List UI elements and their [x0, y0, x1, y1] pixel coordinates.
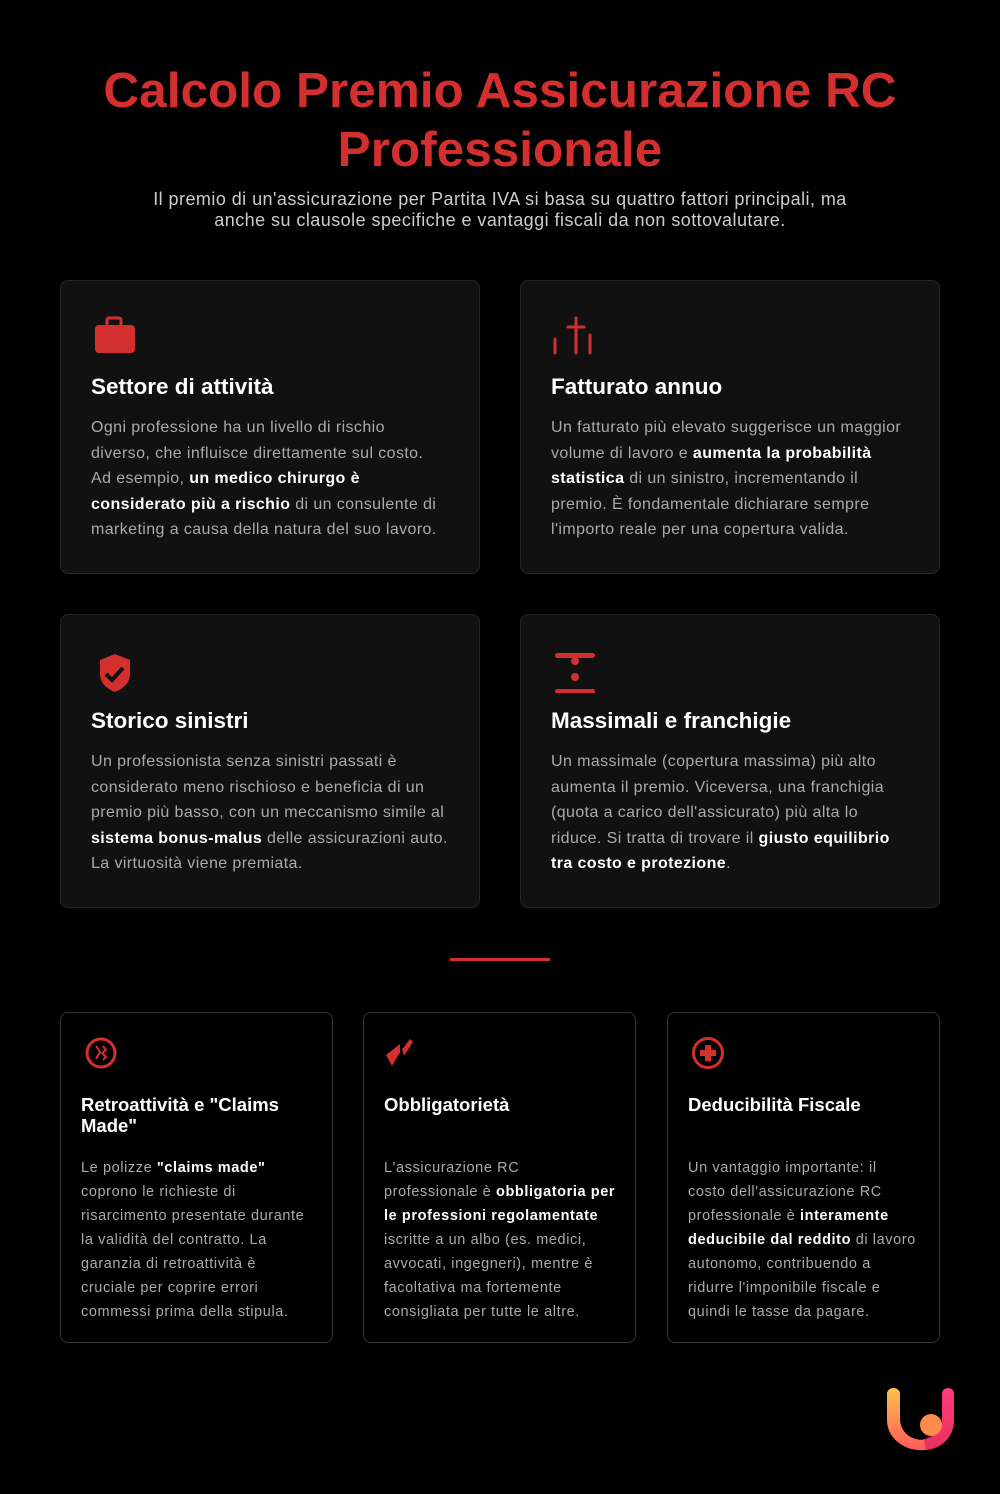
- text: l'importo reale per una copertura valida.: [551, 521, 849, 538]
- text: iscritte a un albo (es. medici,: [384, 1232, 586, 1248]
- text: Le polizze "claims made": [81, 1160, 266, 1176]
- heading: Made": [81, 1115, 137, 1136]
- text: risarcimento presentate durante: [81, 1208, 304, 1224]
- panel: fatturato: [520, 280, 940, 574]
- heading: Massimali e franchigie: [551, 708, 791, 733]
- text: commessi prima della stipula.: [81, 1304, 289, 1320]
- text: [688, 1160, 916, 1320]
- text: riduce. Si tratta di trovare il giusto equilibrio: [551, 830, 890, 846]
- subtitle: Il premio di un'assicurazione per Partita IVA si basa su quattro fattori principali, ma: [153, 189, 847, 209]
- text: costo dell'assicurazione RC: [688, 1184, 882, 1200]
- heading: [81, 1094, 279, 1136]
- heading: Storico sinistri: [91, 708, 249, 733]
- panel: storico: [60, 614, 480, 908]
- icon: briefcase: [95, 316, 135, 353]
- text: professionale è interamente: [688, 1208, 889, 1224]
- text: La virtuosità viene premiata.: [91, 855, 303, 872]
- icon: logo: [887, 1388, 954, 1450]
- panel: massimali: [520, 614, 940, 908]
- icon: bars: [554, 316, 592, 354]
- text: [91, 753, 448, 872]
- icon: circle: [86, 1038, 116, 1068]
- title: [103, 63, 897, 177]
- text: [551, 419, 901, 538]
- text: la validità del contratto. La: [81, 1232, 267, 1248]
- panel: retroattività: [60, 1012, 333, 1343]
- text: volume di lavoro e aumenta la probabilità: [551, 444, 872, 462]
- text: coprono le richieste di: [81, 1184, 236, 1200]
- heading: Retroattività e "Claims: [81, 1094, 279, 1115]
- text: tra costo e protezione.: [551, 855, 731, 872]
- text: Un vantaggio importante: il: [688, 1160, 877, 1176]
- text: aumenta il premio. Viceversa, una franchigia: [551, 778, 884, 796]
- text: Un professionista senza sinistri passati è: [91, 753, 397, 770]
- title: Professionale: [338, 122, 662, 177]
- heading: Settore di attività: [91, 374, 274, 399]
- text: avvocati, ingegneri), mentre è: [384, 1256, 593, 1272]
- icon: bolt: [386, 1039, 413, 1066]
- subtitle: anche su clausole specifiche e vantaggi fiscali da non sottovalutare.: [214, 210, 786, 230]
- panel: settore: [60, 280, 480, 574]
- text: marketing a causa della natura del suo lavoro.: [91, 521, 437, 538]
- text: [384, 1160, 615, 1320]
- text: considerato più a rischio di un consulente di: [91, 496, 436, 512]
- text: Un fatturato più elevato suggerisce un maggior: [551, 419, 901, 436]
- text: le professioni regolamentate: [384, 1208, 598, 1224]
- heading: Deducibilità Fiscale: [688, 1094, 861, 1115]
- text: premio. È fondamentale dichiarare sempre: [551, 496, 869, 512]
- text: statistica di un sinistro, incrementando il: [551, 470, 858, 487]
- text: cruciale per coprire errori: [81, 1280, 258, 1296]
- text: (quota a carico dell'assicurato) più alta lo: [551, 804, 858, 821]
- text: sistema bonus-malus delle assicurazioni auto.: [91, 830, 448, 846]
- text: consigliata per tutte le altre.: [384, 1304, 580, 1320]
- text: [551, 753, 890, 872]
- text: quindi le tasse da pagare.: [688, 1304, 870, 1320]
- text: garanzia di retroattività è: [81, 1256, 256, 1272]
- text: L'assicurazione RC: [384, 1160, 519, 1176]
- title: Calcolo Premio Assicurazione RC: [103, 63, 897, 118]
- panel: obbligatorietà: [363, 1012, 636, 1343]
- icon: range: [555, 653, 595, 693]
- text: Ogni professione ha un livello di rischio: [91, 419, 385, 436]
- text: autonomo, contribuendo a: [688, 1256, 871, 1272]
- text: premio più basso, con un meccanismo simile al: [91, 804, 444, 821]
- text: [91, 419, 437, 538]
- text: Ad esempio, un medico chirurgo è: [91, 470, 360, 487]
- text: [81, 1160, 304, 1320]
- text: deducibile dal reddito di lavoro: [688, 1232, 916, 1248]
- subtitle: [153, 189, 847, 230]
- text: considerato meno rischioso e beneficia di un: [91, 778, 424, 796]
- heading: Obbligatorietà: [384, 1094, 509, 1115]
- text: ridurre l'imponibile fiscale e: [688, 1280, 880, 1296]
- panel: deducibilità: [667, 1012, 940, 1343]
- heading: Fatturato annuo: [551, 374, 722, 399]
- text: professionale è obbligatoria per: [384, 1184, 615, 1200]
- icon: shield check: [100, 654, 130, 692]
- text: facoltativa ma fortemente: [384, 1280, 562, 1296]
- text: diverso, che influisce direttamente sul costo.: [91, 444, 423, 462]
- icon: plus circle: [692, 1037, 724, 1069]
- text: Un massimale (copertura massima) più alto: [551, 753, 876, 770]
